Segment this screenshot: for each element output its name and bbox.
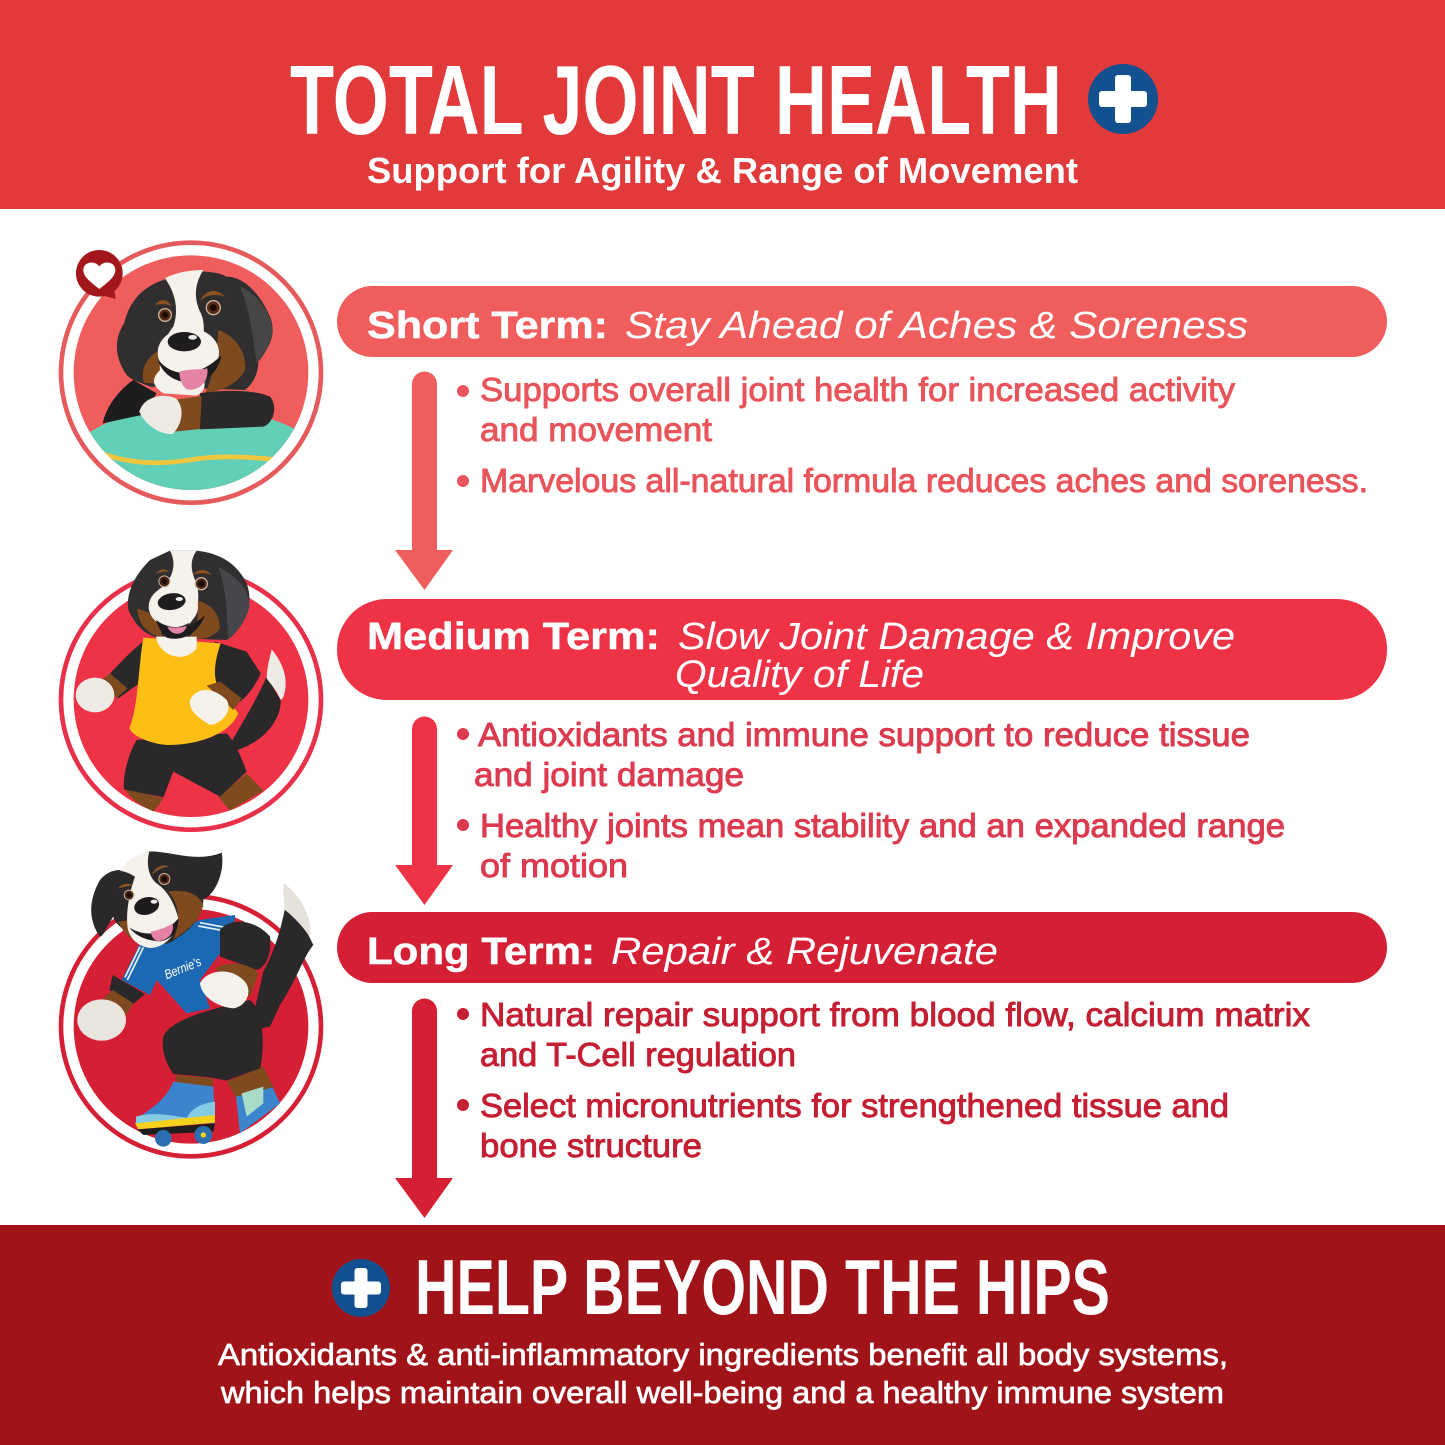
- panel: medium term heading pill: [337, 599, 1387, 700]
- text block: short term bullets: Marvelous all-natural formula reduces aches and soreness.: [480, 462, 1368, 499]
- panel: short term dog illustration: [61, 243, 321, 503]
- panel: long term heading pill: Long Term:: [367, 931, 595, 973]
- text block: medium term bullets: Antioxidants and immune support to reduce tissue: [478, 716, 1250, 753]
- title: TOTAL JOINT HEALTH: [290, 45, 1062, 155]
- panel: medium term heading pill: Medium Term:: [367, 616, 660, 658]
- panel: long term dog illustration: [61, 852, 321, 1156]
- text block: medium term bullets: Healthy joints mean stability and an expanded range: [480, 807, 1285, 844]
- text block: long term bullets: Natural repair support from blood flow, calcium matrix: [480, 996, 1311, 1033]
- text block: long term bullets: and T-Cell regulation: [480, 1036, 796, 1073]
- text block: medium term bullets: [457, 716, 1285, 884]
- text block: long term bullets: [457, 996, 1311, 1164]
- text block: medium term bullets: and joint damage: [474, 756, 744, 793]
- footer text: which helps maintain overall well-being and a healthy immune system: [220, 1375, 1224, 1410]
- footer text: Antioxidants & anti-inflammatory ingredients benefit all body systems,: [218, 1337, 1228, 1372]
- header banner: [0, 0, 1445, 209]
- panel: medium term heading pill: Quality of Life: [675, 654, 924, 696]
- arrow: long term: [395, 998, 453, 1218]
- subtitle: Support for Agility & Range of Movement: [367, 150, 1078, 191]
- text block: short term bullets: [457, 371, 1368, 499]
- footer text: [218, 1337, 1228, 1410]
- footer banner: [0, 1225, 1445, 1445]
- text block: medium term bullets: of motion: [480, 847, 628, 884]
- arrow: medium term: [395, 716, 453, 905]
- panel: medium term heading pill: Slow Joint Damage & Improve: [678, 616, 1235, 658]
- panel: short term heading pill: Stay Ahead of Aches & Soreness: [625, 305, 1248, 347]
- footer title: HELP BEYOND THE HIPS: [415, 1243, 1110, 1331]
- text block: short term bullets: Supports overall joint health for increased activity: [480, 371, 1236, 408]
- icon: blue medical cross: [332, 1259, 390, 1317]
- icon: blue medical cross: [1088, 64, 1158, 134]
- panel: short term heading pill: Short Term:: [367, 305, 608, 347]
- panel: long term heading pill: [337, 912, 1387, 983]
- panel: long term heading pill: Repair & Rejuvenate: [611, 931, 998, 973]
- panel: short term heading pill: [337, 286, 1387, 357]
- icon: heart speech bubble: [76, 250, 123, 299]
- text block: long term bullets: bone structure: [480, 1127, 702, 1164]
- panel: medium term dog illustration: [61, 551, 321, 830]
- arrow: short term: [395, 372, 453, 590]
- text block: long term bullets: Select micronutrients for strengthened tissue and: [480, 1087, 1229, 1124]
- text block: short term bullets: and movement: [480, 411, 712, 448]
- shirt lettering: Bernie's: [162, 954, 204, 982]
